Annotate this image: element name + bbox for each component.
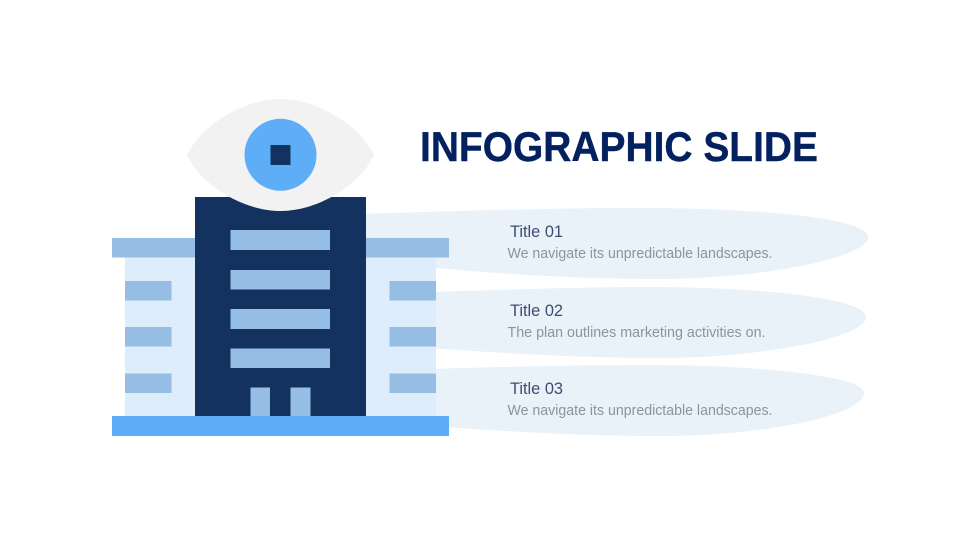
eye white	[187, 99, 374, 211]
item 2 heading: Title 02	[510, 302, 563, 320]
iris	[244, 119, 316, 191]
panel: item 3 blob	[430, 365, 864, 436]
item 2 description: The plan outlines marketing activities on.	[508, 324, 766, 341]
panel: item 1 blob	[360, 208, 868, 279]
building base	[112, 416, 449, 436]
left wing windows	[125, 281, 172, 393]
pupil	[270, 145, 290, 165]
right wing windows	[390, 281, 436, 393]
item 1 heading: Title 01	[510, 223, 563, 241]
item 1 description: We navigate its unpredictable landscapes.	[508, 245, 772, 262]
title: INFOGRAPHIC SLIDE	[420, 123, 818, 170]
text block: item 2	[508, 302, 766, 341]
item 3 heading: Title 03	[510, 380, 563, 398]
tower windows	[230, 230, 330, 368]
central tower	[195, 197, 366, 416]
icon: eye	[187, 99, 374, 211]
roof band	[112, 238, 449, 258]
item 3 description: We navigate its unpredictable landscapes.	[508, 402, 772, 419]
text block: item 3	[508, 380, 772, 419]
building side wings	[125, 257, 436, 417]
panel: item 2 blob	[430, 287, 866, 358]
icon: building with eye	[112, 99, 449, 436]
tower doors	[250, 388, 310, 416]
text block: item 1	[508, 223, 772, 262]
